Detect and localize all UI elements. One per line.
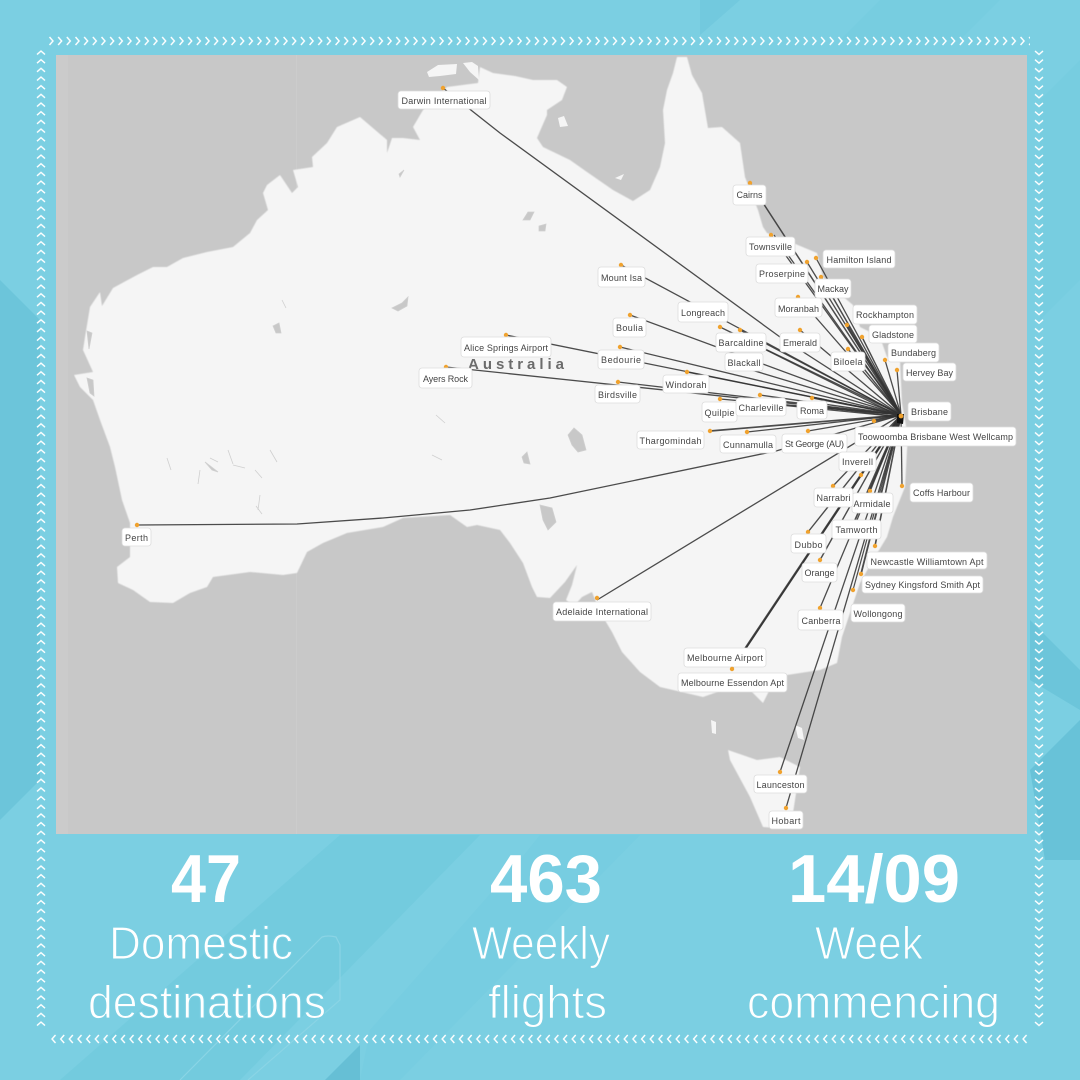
label: Gladstone: Gladstone [872,330,914,340]
label: Ayers Rock [419,365,472,388]
label: Sydney Kingsford Smith Apt [859,572,983,593]
label: Coffs Harbour [900,483,973,502]
chevron border: right [1034,49,1044,1029]
label: Cunnamulla: Cunnamulla [723,440,773,450]
stat: 463 weekly flights: 463 [490,841,602,917]
route lines converging on Brisbane [137,88,904,808]
label: Boulia [613,313,646,337]
label: Birdsville: Birdsville [598,390,637,400]
label: Roma [797,396,827,419]
label: Charleville: Charleville [738,403,784,413]
label: Mount Isa: Mount Isa [601,273,642,283]
label: Rockhampton: Rockhampton [856,310,914,320]
label: Townsville: Townsville [749,242,792,252]
label: Quilpie [702,397,737,422]
label: Melbourne Essendon Apt [678,667,787,692]
label: Tamworth [832,520,881,539]
label: Mount Isa [598,263,645,287]
label: Mackay: Mackay [818,284,849,294]
stat: 463 weekly flights: Weekly [472,917,610,969]
label: Wollongong: Wollongong [854,609,902,619]
label: Dubbo [791,530,826,553]
label: Launceston: Launceston [756,780,804,790]
label: Emerald: Emerald [783,338,817,348]
stat: 14/09 week commencing [747,841,1000,1028]
label: Rockhampton [845,305,917,327]
label: Alice Springs Airport: Alice Springs Airport [464,343,548,353]
label: Proserpine [756,260,809,283]
label: Cairns: Cairns [736,190,763,200]
label: Hobart: Hobart [772,816,801,826]
label: Bedourie: Bedourie [601,355,641,365]
label: Cunnamulla [720,430,776,453]
country label: Australia: Australia [468,356,565,373]
label: Brisbane [899,402,951,421]
label: Armidale: Armidale [854,499,890,509]
label: Hamilton Island: Hamilton Island [826,255,892,265]
label: Longreach: Longreach [681,308,725,318]
label: Blackall: Blackall [728,358,760,368]
label: Launceston [754,770,807,793]
label: Hervey Bay [895,363,956,381]
label: St George (AU): St George (AU) [785,439,844,449]
label: Melbourne Essendon Apt: Melbourne Essendon Apt [681,678,784,688]
label: Canberra: Canberra [802,616,840,626]
destination labels [122,86,1016,829]
inland lakes [87,170,586,530]
stat: 463 weekly flights [472,841,610,1028]
label: Windorah: Windorah [666,380,706,390]
label: Darwin International: Darwin International [402,96,486,106]
chevron border: bottom [50,1034,1030,1044]
label: Sydney Kingsford Smith Apt: Sydney Kingsford Smith Apt [865,580,980,590]
islands [427,62,804,740]
label: Orange: Orange [804,568,834,578]
stat: 47 domestic destinations: Domestic [109,917,293,969]
label: Ayers Rock: Ayers Rock [423,374,468,384]
label: Canberra [798,606,843,630]
label: Biloela: Biloela [834,357,862,367]
label: Barcaldine: Barcaldine [718,338,764,348]
label: Toowoomba Brisbane West Wellcamp: Toowoomba Brisbane West Wellcamp [858,432,1013,442]
label: Dubbo: Dubbo [794,540,822,550]
landmass: mainland Australia [74,57,908,703]
label: Melbourne Airport: Melbourne Airport [687,653,763,663]
label: Perth: Perth [125,533,148,543]
label: Quilpie: Quilpie [704,408,734,418]
label: Hamilton Island [814,250,895,268]
label: Emerald [780,328,820,352]
label: Newcastle Williamtown Apt: Newcastle Williamtown Apt [870,557,984,567]
label: Newcastle Williamtown Apt [867,544,987,569]
label: Windorah [663,370,709,393]
stat: 14/09 week commencing: commencing [747,976,1000,1028]
label: Cairns [733,181,766,205]
label: Charleville [736,393,786,416]
panel: route map of Australia [56,55,1027,834]
label: Armidale [852,489,893,513]
label: Narrabri [814,484,853,507]
label: Inverell: Inverell [842,457,873,467]
label: Darwin International [398,86,490,109]
label: Hobart [769,806,803,829]
label: Inverell [839,452,876,477]
label: Toowoomba Brisbane West Wellcamp [855,419,1016,446]
label: Gladstone [860,325,917,343]
label: Coffs Harbour: Coffs Harbour [913,488,970,498]
stat: 14/09 week commencing: Week [815,917,924,969]
label: Orange [802,558,837,582]
label: Hervey Bay: Hervey Bay [906,368,954,378]
label: Adelaide International [553,596,651,621]
label: Wollongong [851,588,905,622]
label: Brisbane: Brisbane [911,407,948,417]
landmass: Tasmania [728,750,800,828]
label: Adelaide International: Adelaide International [556,607,648,617]
label: Moranbah: Moranbah [778,304,819,314]
chevron border: top [48,36,1030,46]
label: Perth [122,523,151,546]
label: Biloela [831,347,865,371]
label: Boulia: Boulia [616,323,643,333]
label: Thargomindah: Thargomindah [640,436,702,446]
label: St George (AU) [782,429,847,453]
label: Longreach [678,302,728,329]
label: Barcaldine [716,328,766,352]
label: Bundaberg: Bundaberg [891,348,936,358]
label: Proserpine: Proserpine [759,269,805,279]
ocean [56,55,1027,834]
label: Narrabri: Narrabri [816,493,850,503]
label: Blackall [725,353,763,371]
label: Bundaberg [883,343,939,362]
label: Mackay [815,275,851,298]
label: Roma: Roma [800,406,824,416]
label: Townsville [746,233,795,256]
stat: 463 weekly flights: flights [488,976,607,1028]
label: Alice Springs Airport [461,333,551,357]
stat: 47 domestic destinations: destinations [88,976,326,1028]
label: Melbourne Airport [684,648,766,667]
label: Thargomindah [637,429,712,449]
label: Birdsville [595,380,640,403]
chevron border: left [36,49,46,1029]
label: Bedourie [598,345,644,369]
stat: 14/09 week commencing: 14/09 [788,841,960,917]
label: Tamworth: Tamworth [836,525,878,535]
stat: 47 domestic destinations [88,841,326,1028]
stat: 47 domestic destinations: 47 [171,841,241,917]
label: Moranbah [775,295,822,317]
